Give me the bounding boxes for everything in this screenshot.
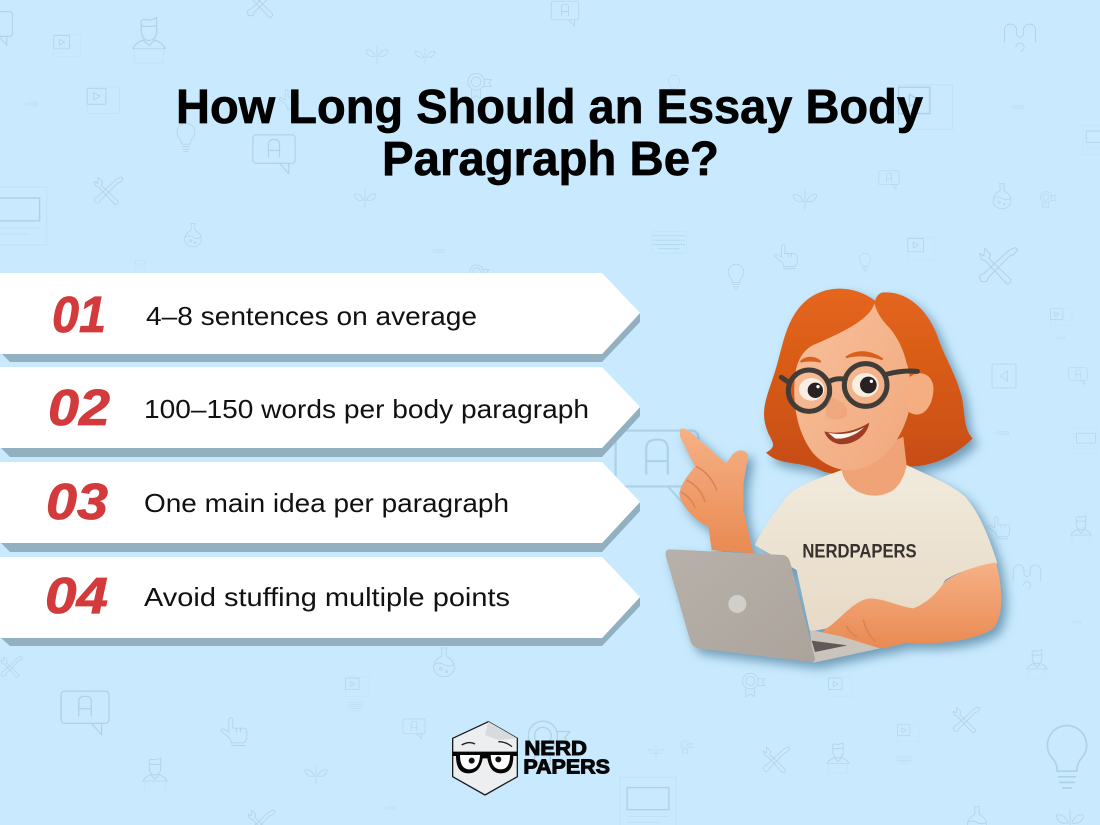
ear	[908, 373, 933, 415]
nose	[826, 397, 847, 420]
hexagon mascot	[453, 722, 517, 795]
logo wordmark	[523, 737, 610, 778]
banner 03: 03	[46, 473, 108, 530]
title: How Long Should an Essay Body	[176, 81, 923, 134]
logo wordmark: PAPERS	[523, 755, 610, 778]
banner 01	[0, 273, 640, 362]
logo wordmark: NERD	[524, 737, 587, 760]
neck	[842, 437, 907, 497]
t-shirt	[755, 465, 997, 632]
logo: Nerd Papers	[453, 722, 610, 795]
illustration: red-haired student with glasses and laptop	[665, 289, 1001, 663]
banner 01: 4–8 sentences on average	[146, 301, 477, 331]
laptop	[665, 549, 880, 663]
eyebrows	[801, 352, 883, 362]
pointing hand and raised arm	[679, 428, 753, 553]
banner 02: 02	[48, 379, 110, 436]
eyes	[799, 373, 879, 401]
lower arm and typing hand	[822, 563, 1001, 648]
mouth	[824, 423, 869, 444]
banner 02: 100–150 words per body paragraph	[144, 394, 589, 424]
hair	[764, 289, 973, 474]
banner 02	[0, 367, 640, 457]
banner 04: Avoid stuffing multiple points	[144, 582, 510, 612]
face	[794, 303, 911, 470]
banner 03	[0, 462, 640, 552]
title: Paragraph Be?	[382, 133, 719, 186]
banner 03: One main idea per paragraph	[144, 488, 509, 518]
banner 01: 01	[52, 286, 106, 343]
shirt lettering: NERDPAPERS	[802, 541, 917, 562]
list of four arrow banners	[0, 273, 640, 646]
glasses	[781, 364, 917, 411]
banner 04: 04	[45, 567, 108, 624]
title	[176, 81, 923, 186]
banner 04	[0, 557, 640, 646]
